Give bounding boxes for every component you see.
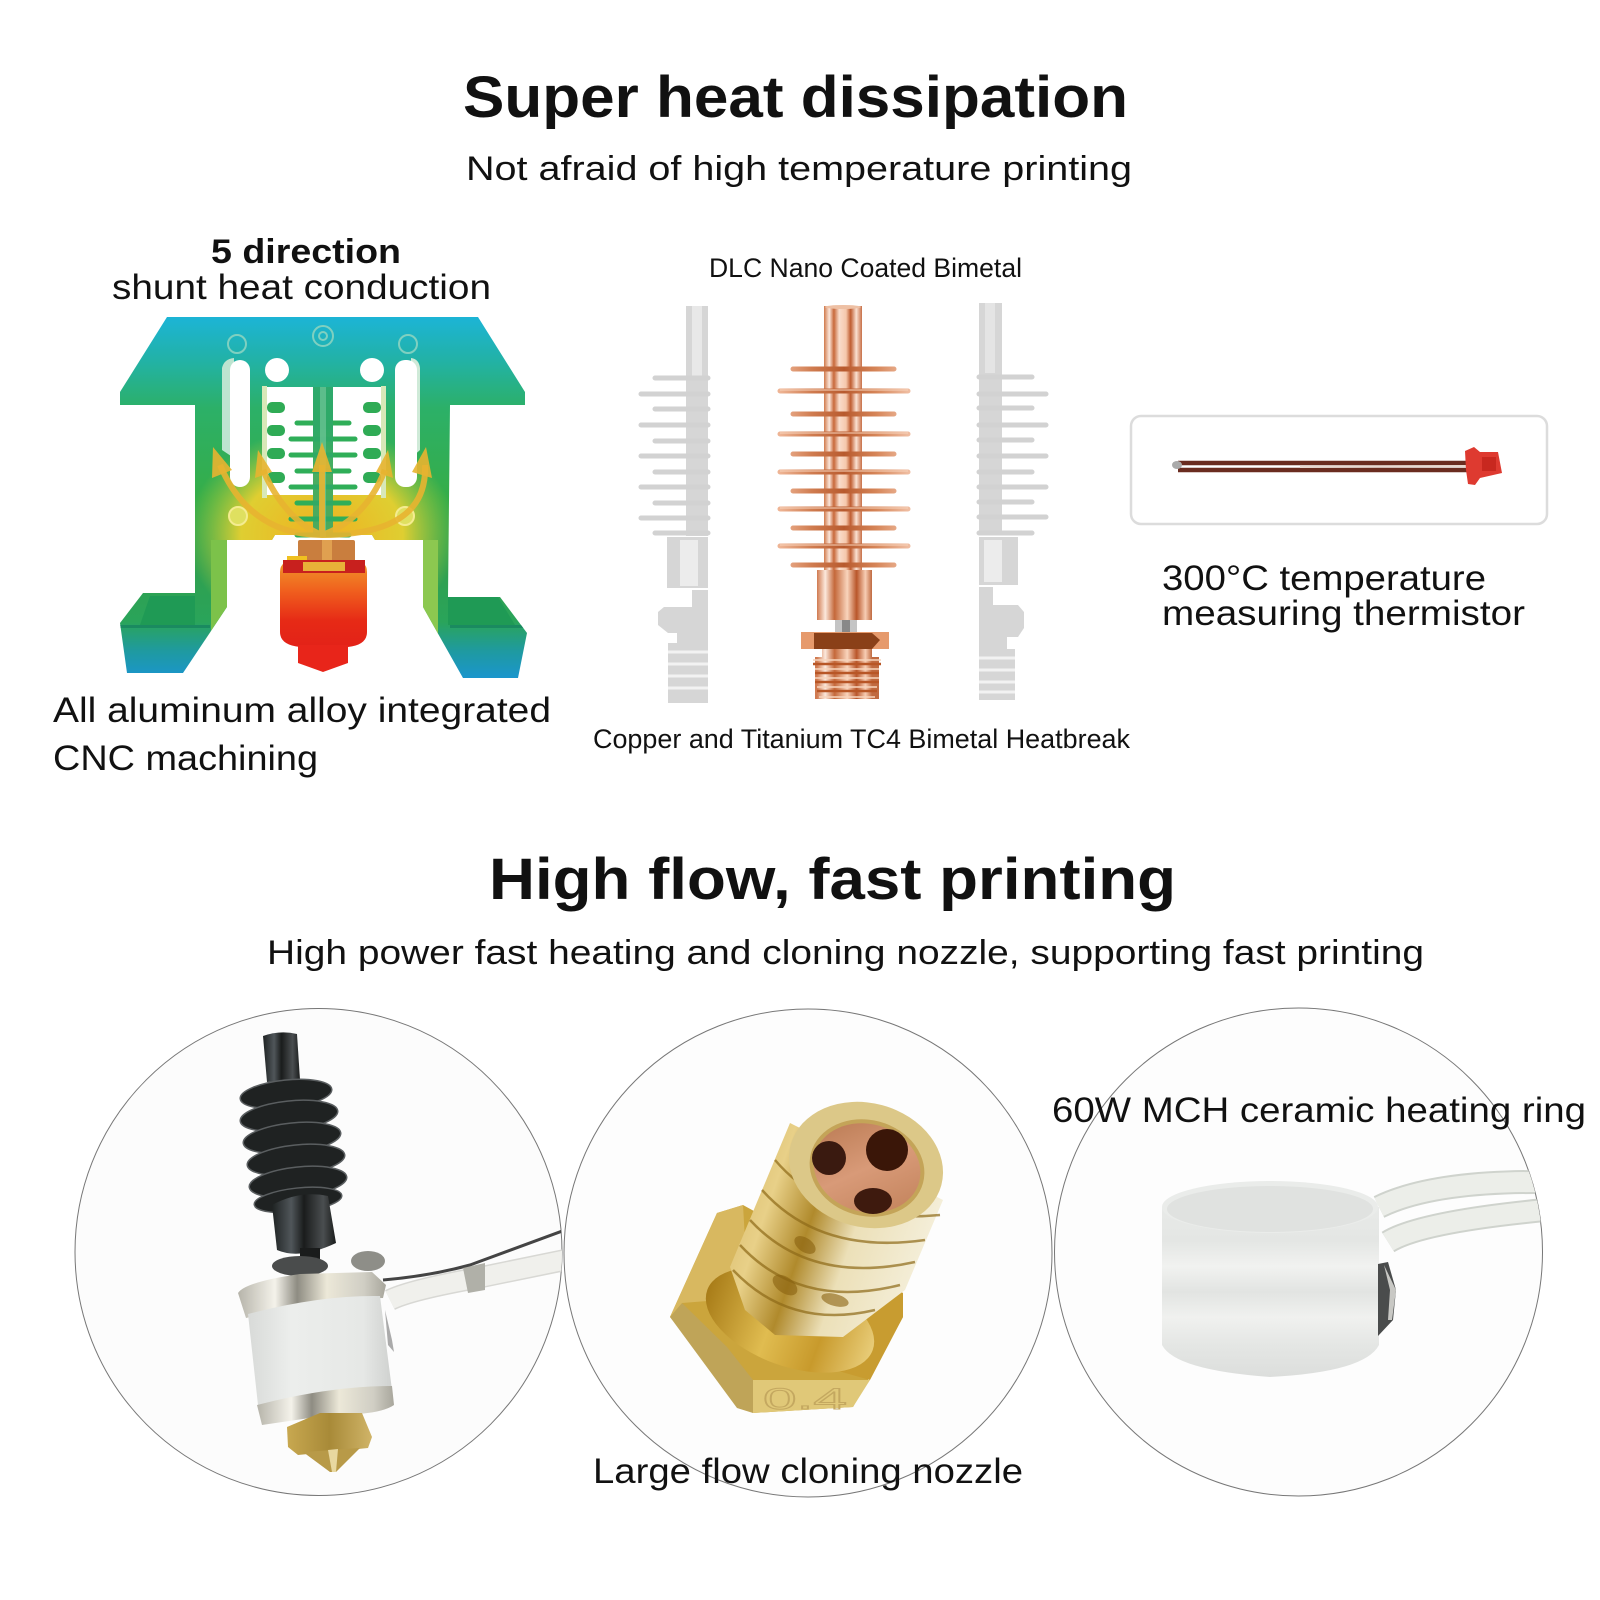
lower holes [229,507,414,525]
thermal bracket illustration [120,317,527,678]
lead wires [1379,1182,1535,1207]
heat arrows [220,465,425,535]
title: high flow: High flow, fast printing [489,847,1176,912]
copper insert [803,1112,931,1224]
brass neck [692,1247,888,1393]
label: copper titanium: Copper and Titanium TC4 Bimetal Heatbreak [593,724,1130,754]
caption: 300C: 300°C temperature [1162,559,1486,598]
subtitle: high power: High power fast heating and cloning nozzle, supporting fast printing [267,934,1424,972]
circle panel: ceramic ring [1054,1008,1545,1496]
heatbreak copper centre [780,305,908,699]
terminal [1378,1262,1396,1336]
subtitle: high temperature: Not afraid of high temperature printing [466,150,1132,188]
panel: thermistor [1131,416,1547,524]
ceramic heater [248,1296,392,1405]
caption: large flow nozzle: Large flow cloning nozzle [593,1452,1023,1491]
thermistor connector [1465,447,1502,485]
label: dlc coated: DLC Nano Coated Bimetal [709,253,1022,283]
heatbreak left ghost half [641,306,708,703]
black heatbreak [239,1032,385,1276]
caption: measuring thermistor: measuring thermistor [1162,594,1525,633]
hot end heater [280,540,367,672]
ceramic ring body [1162,1207,1379,1377]
heatbreak right ghost half [979,303,1046,700]
circle panel: hot end [75,1008,565,1496]
slots and holes [222,358,234,458]
metal top ring [238,1272,386,1318]
caption: all aluminum alloy: All aluminum alloy integrated [53,691,551,730]
caption: 60W ring: 60W MCH ceramic heating ring [1052,1091,1586,1130]
heading: shunt heat conduction: shunt heat conduction [112,268,491,307]
nozzle face [775,1085,957,1245]
cables [390,1260,565,1300]
thread body [730,1123,943,1337]
brass hex base [670,1205,903,1413]
centre fins [291,423,355,535]
circle panel: nozzle [564,1009,1052,1497]
heading: 5 direction: 5 direction [211,233,401,271]
metal bottom ring [257,1386,394,1425]
title: super heat dissipation: Super heat dissipation [463,65,1128,130]
heatsink windows [262,387,313,495]
engraved size: 0.4 [763,1383,847,1416]
caption: cnc machining: CNC machining [53,739,318,778]
bracket body [120,317,527,678]
brass nozzle [287,1413,372,1472]
fins [780,369,908,565]
thermistor wire [1172,461,1468,470]
